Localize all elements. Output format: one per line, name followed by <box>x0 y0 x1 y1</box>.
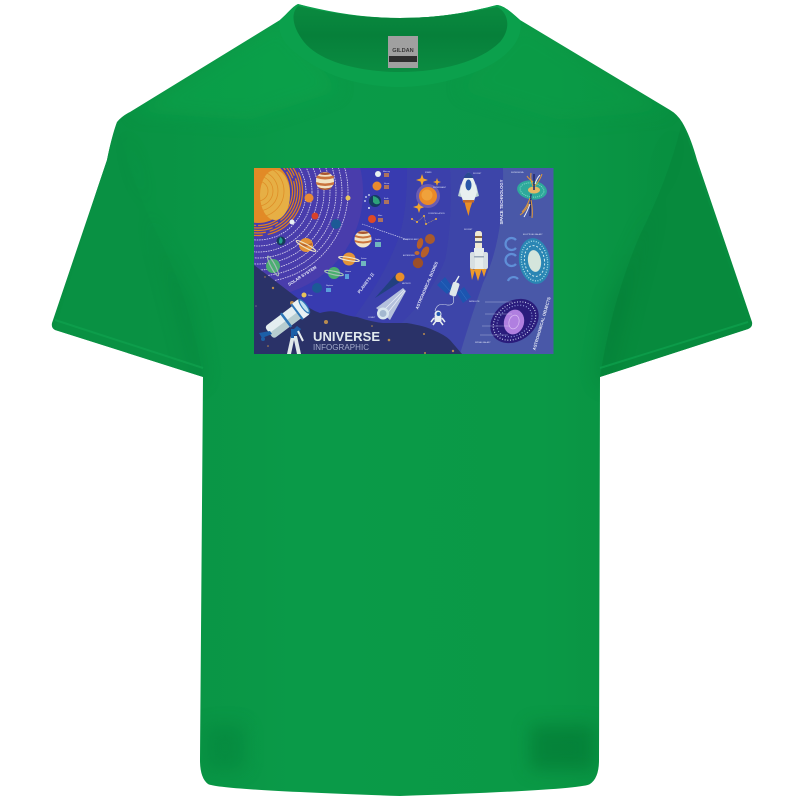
ring indicators <box>506 238 518 281</box>
planet: uranus 2 <box>324 267 344 279</box>
printed infographic panel <box>254 168 554 354</box>
icon: rocket two <box>470 231 488 281</box>
meteor <box>375 272 404 298</box>
planet: mars <box>312 212 318 220</box>
icon: earth <box>364 194 381 209</box>
section heading: space technology: SPACE TECHNOLOGY <box>499 179 504 224</box>
icon: elliptical galaxy <box>516 236 553 286</box>
planet captions: Jupiter <box>375 238 381 241</box>
title <box>314 332 380 350</box>
planet captions: Neptune <box>326 284 333 287</box>
planet captions: Mercury <box>383 170 390 173</box>
panel: planets <box>302 170 408 298</box>
panel: space technology <box>431 172 488 325</box>
mount <box>259 331 272 338</box>
comet <box>376 288 406 320</box>
subheading: INFOGRAPHIC <box>313 343 369 352</box>
panel: astronomical bodies <box>368 171 447 320</box>
object captions <box>475 171 543 344</box>
planet captions: Earth <box>384 197 389 200</box>
planet captions: Venus <box>384 183 389 185</box>
planet: neptune <box>331 219 341 229</box>
body captions <box>368 171 447 319</box>
body captions: METEOR <box>402 283 411 285</box>
section heading: planets: PLANETS ☷ <box>356 272 375 294</box>
icon: sun <box>254 168 304 236</box>
section heading: astronomical objects: ASTRONOMICAL OBJECTS <box>532 296 552 351</box>
tripod <box>287 336 301 354</box>
planet captions <box>308 170 390 297</box>
object captions: ELLIPTICAL GALAXY <box>523 233 543 236</box>
heading: UNIVERSE <box>313 329 380 344</box>
technology captions <box>464 173 482 303</box>
object captions: SPIRAL GALAXY <box>475 341 491 344</box>
planet: small yellow <box>346 196 350 200</box>
body captions: ASTEROIDS <box>403 254 415 257</box>
divider label line <box>362 224 408 240</box>
icon: astronaut <box>431 296 454 325</box>
tube <box>266 298 310 338</box>
planet: earth dark <box>276 236 286 246</box>
body captions: STARS <box>425 171 432 174</box>
planet captions: Pluto <box>308 294 312 297</box>
orbits <box>254 168 348 281</box>
technology captions: ROCKET <box>473 173 482 175</box>
panel: solar system <box>254 168 350 281</box>
planet: saturn 2 <box>338 252 360 266</box>
icon: spiral galaxy <box>480 290 547 352</box>
panel: astronomical objects <box>475 171 553 352</box>
asteroids <box>413 234 435 268</box>
planet captions: Saturn <box>361 257 367 260</box>
body captions: CONSTELLATION <box>428 212 445 215</box>
section heading: astronomical bodies: ASTRONOMICAL BODIES <box>414 261 439 310</box>
sky stars <box>255 276 454 354</box>
icon: telescope <box>259 297 312 354</box>
icon: satellite <box>437 276 471 303</box>
object captions: SUPERNOVA <box>511 171 524 174</box>
body captions: COMET <box>368 317 376 319</box>
icon: rocket one <box>458 172 479 216</box>
technology captions: ROCKET <box>464 229 473 231</box>
navy wave <box>254 265 462 354</box>
jets <box>520 173 542 218</box>
planet: white <box>290 220 294 224</box>
disc <box>516 179 548 201</box>
stars <box>413 174 441 213</box>
collar rib <box>279 4 521 87</box>
collar inner neck <box>293 6 507 72</box>
label brand: GILDAN <box>392 48 414 54</box>
planet: saturn <box>295 238 317 253</box>
planet captions: Uranus <box>345 270 351 273</box>
icon: star body <box>416 184 440 208</box>
background bands <box>254 168 554 354</box>
planet captions: Mars <box>378 214 382 217</box>
caption color chips <box>378 173 389 222</box>
neck label <box>388 36 418 68</box>
body captions: ASTEROID BELT <box>403 238 419 241</box>
icon: supernova <box>516 173 548 218</box>
constellation <box>412 216 436 224</box>
body captions: SUPERGIANT <box>433 186 447 189</box>
technology captions: SATELLITE <box>469 300 480 303</box>
planet: striped jupiter <box>354 230 372 248</box>
planet: jupiter <box>316 172 334 190</box>
planet: mercury <box>304 194 314 202</box>
planet: uranus ringed <box>266 255 280 277</box>
section heading: solar system: SOLAR SYSTEM <box>287 264 318 287</box>
